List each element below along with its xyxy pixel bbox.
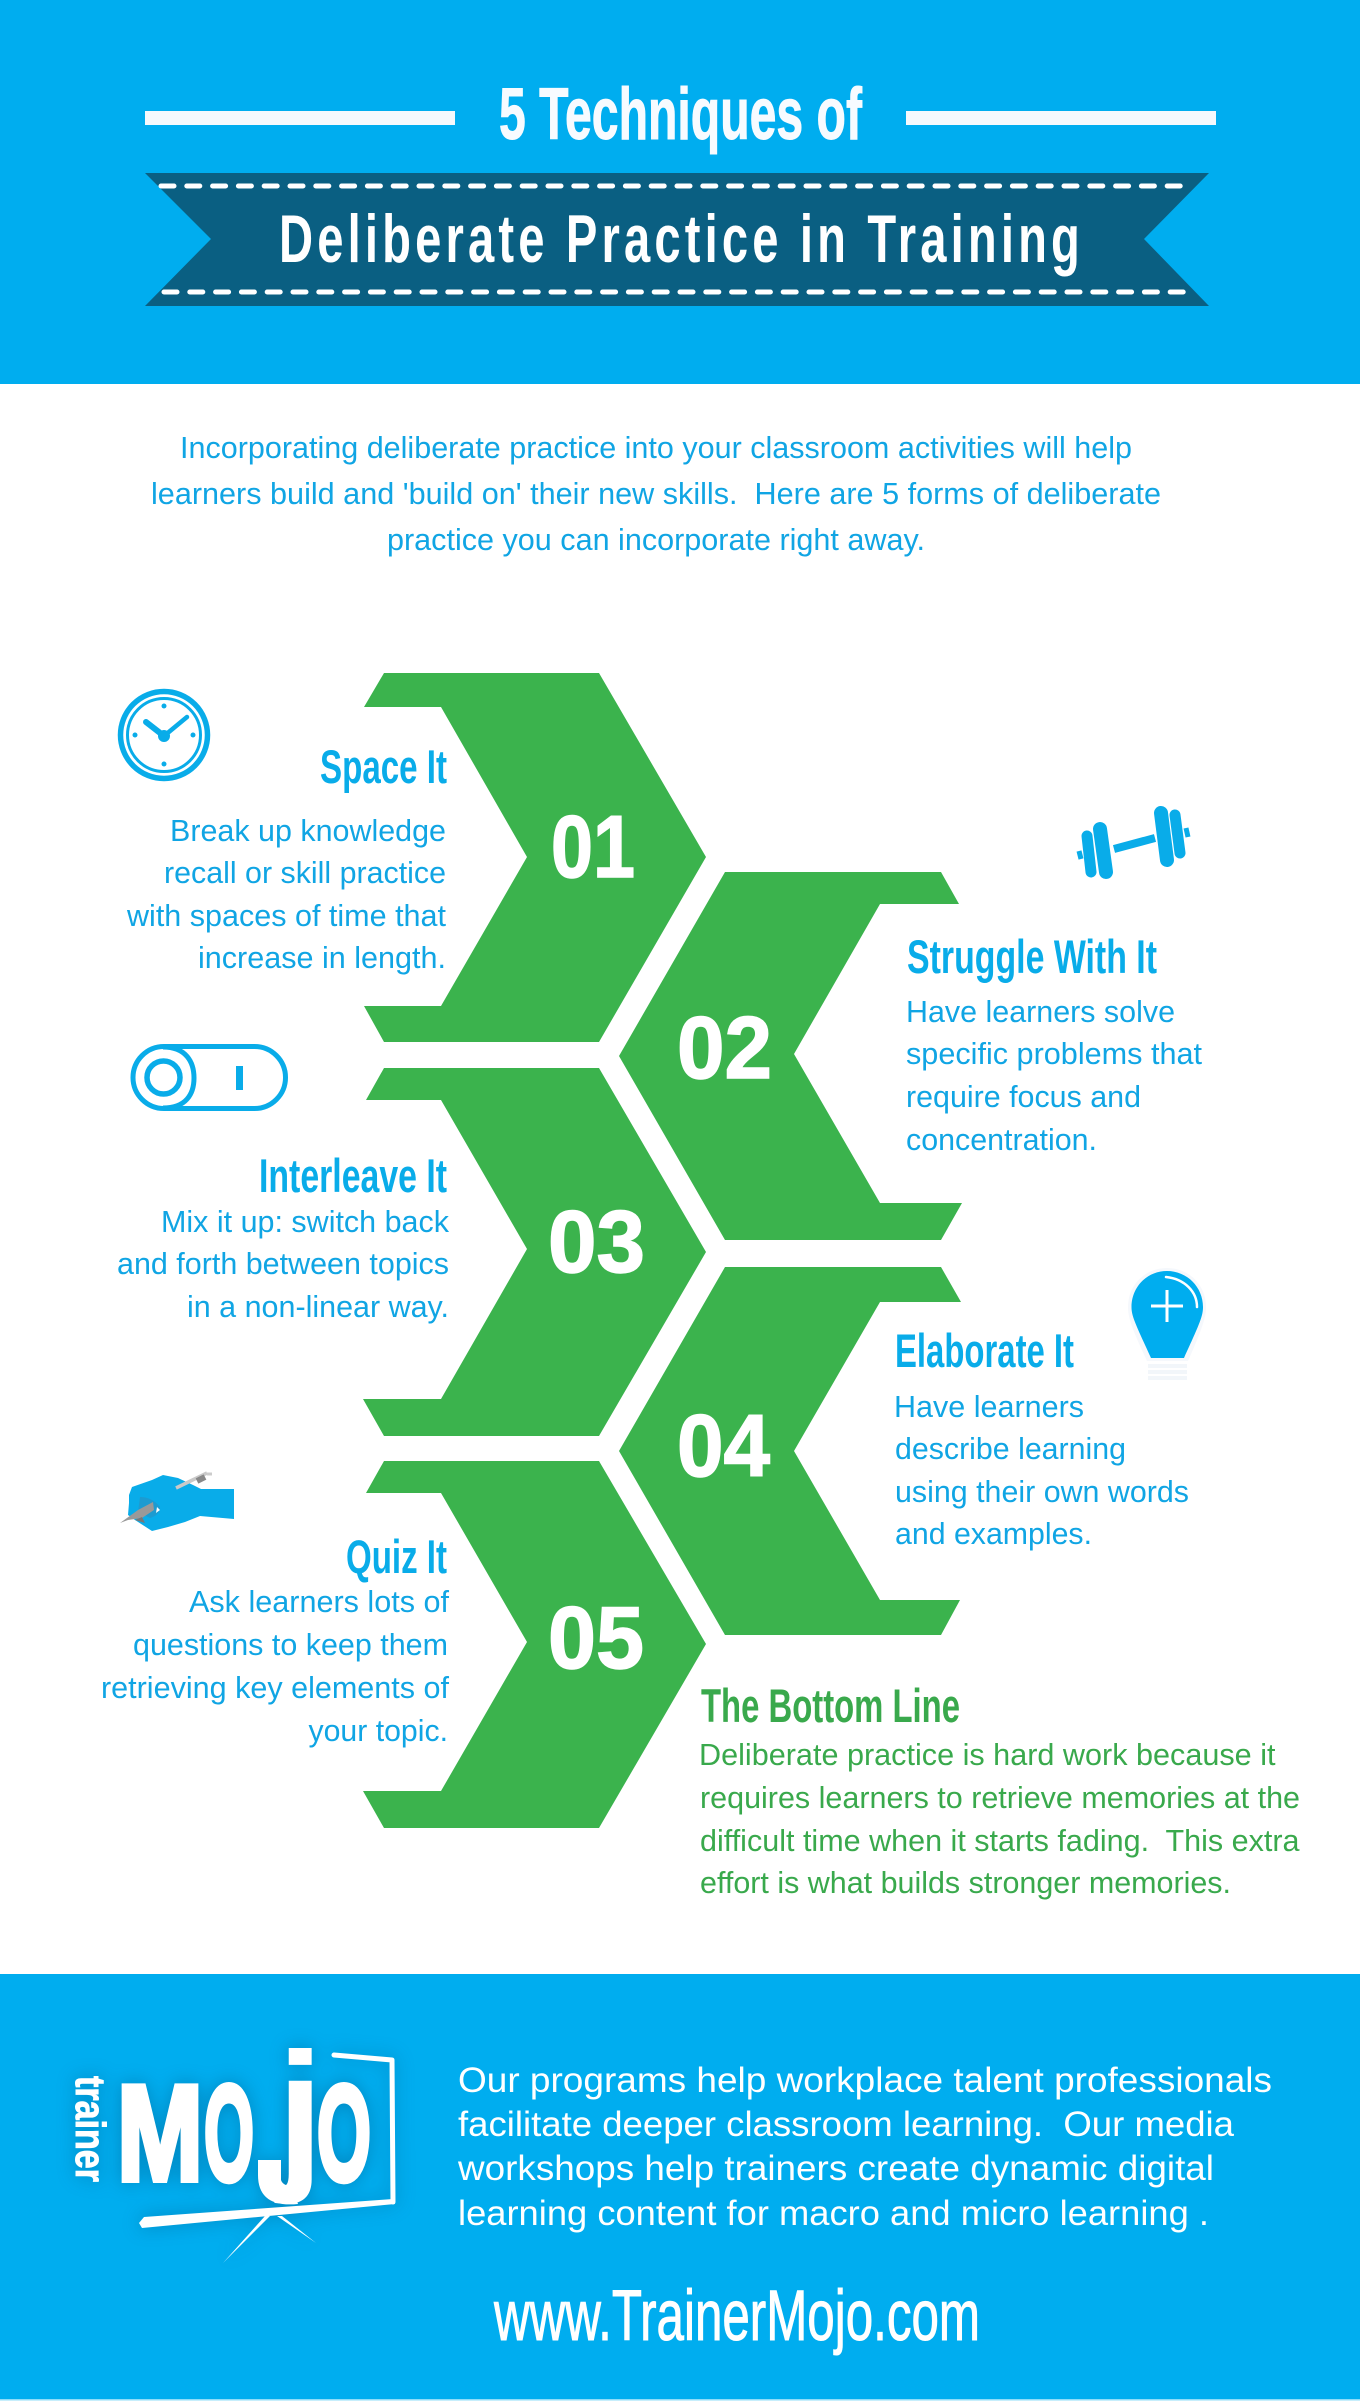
- text block: Elaborate It: and examples.: [895, 1517, 1092, 1551]
- text block: Struggle With It: specific problems that: [906, 1037, 1203, 1071]
- text block: Elaborate It: using their own words: [895, 1475, 1189, 1509]
- text block: Space It: increase in length.: [198, 941, 446, 975]
- chevron 04: [619, 1267, 961, 1635]
- footer description: facilitate deeper classroom learning. Our media: [458, 2105, 1235, 2144]
- text block: The Bottom Line: The Bottom Line: [701, 1679, 960, 1732]
- text block: Interleave It: in a non-linear way.: [187, 1290, 449, 1324]
- icon: clock: [120, 692, 208, 778]
- intro text: [151, 431, 1161, 557]
- chevron 01: [364, 673, 706, 1042]
- text block: Struggle With It: Struggle With It: [907, 930, 1157, 983]
- text block: Quiz It: Ask learners lots of: [189, 1585, 450, 1619]
- logo: Trainer Mojo: O: [317, 2057, 371, 2209]
- logo: Trainer Mojo: O: [204, 2057, 254, 2209]
- text block: Interleave It: and forth between topics: [117, 1247, 449, 1281]
- chevron 02: 02: [677, 998, 772, 1097]
- text block: Struggle With It: concentration.: [906, 1123, 1097, 1157]
- text block: Elaborate It: [894, 1324, 1189, 1551]
- text block: The Bottom Line: [699, 1679, 1300, 1900]
- text block: Struggle With It: require focus and: [906, 1080, 1141, 1114]
- text block: Interleave It: Interleave It: [259, 1149, 447, 1202]
- text block: Struggle With It: [906, 930, 1203, 1157]
- panel: header: [0, 0, 1360, 384]
- chevron 02: [619, 872, 962, 1240]
- icon: light bulb: [1128, 1268, 1206, 1380]
- chevron 05: 05: [548, 1588, 644, 1687]
- text block: Quiz It: [101, 1530, 450, 1748]
- text block: Space It: recall or skill practice: [164, 856, 446, 890]
- text block: Quiz It: your topic.: [308, 1714, 448, 1748]
- chevron 03: 03: [548, 1192, 645, 1291]
- chevron 04: 04: [677, 1396, 770, 1495]
- intro text: learners build and 'build on' their new skills. Here are 5 forms of deliberate: [151, 477, 1161, 511]
- text block: The Bottom Line: difficult time when it starts fading. This extra: [700, 1824, 1300, 1858]
- logo: Trainer Mojo: trainer: [67, 2076, 114, 2182]
- text block: Elaborate It: describe learning: [895, 1432, 1126, 1466]
- title: 5 Techniques of: 5 Techniques of: [499, 74, 862, 155]
- text block: Quiz It: retrieving key elements of: [101, 1671, 450, 1705]
- text block: Interleave It: [117, 1149, 450, 1324]
- text block: Interleave It: Mix it up: switch back: [161, 1205, 450, 1239]
- text block: Struggle With It: Have learners solve: [906, 995, 1175, 1029]
- chevron 03: [363, 1068, 706, 1436]
- chevron 01: 01: [551, 797, 635, 896]
- logo: Trainer Mojo: [67, 2019, 395, 2263]
- logo: Trainer Mojo: M: [117, 2057, 203, 2209]
- footer description: workshops help trainers create dynamic digital: [457, 2149, 1214, 2188]
- chevron 05: [363, 1461, 706, 1828]
- text block: The Bottom Line: requires learners to retrieve memories at the: [700, 1781, 1300, 1815]
- footer description: learning content for macro and micro learning .: [458, 2194, 1209, 2233]
- text block: Elaborate It: Have learners: [894, 1390, 1084, 1424]
- text block: Quiz It: Quiz It: [346, 1530, 447, 1583]
- text block: Space It: [126, 740, 447, 975]
- text block: Space It: Space It: [320, 740, 447, 793]
- text block: The Bottom Line: effort is what builds stronger memories.: [700, 1866, 1231, 1900]
- intro text: Incorporating deliberate practice into your classroom activities will help: [180, 431, 1132, 465]
- intro text: practice you can incorporate right away.: [387, 523, 925, 557]
- ribbon banner: [145, 173, 1209, 306]
- website url: www.TrainerMojo.com: [493, 2277, 980, 2356]
- icon: hand writing with pen: [120, 1473, 234, 1531]
- footer description: [457, 2061, 1272, 2233]
- footer description: Our programs help workplace talent professionals: [458, 2061, 1272, 2100]
- icon: dumbbell: [1079, 813, 1188, 872]
- text block: Elaborate It: Elaborate It: [895, 1324, 1074, 1377]
- panel: footer: [0, 1974, 1360, 2400]
- text block: The Bottom Line: Deliberate practice is hard work because it: [699, 1738, 1276, 1772]
- icon: toggle switch: [133, 1046, 286, 1108]
- text block: Space It: with spaces of time that: [126, 899, 447, 933]
- text block: Quiz It: questions to keep them: [133, 1628, 448, 1662]
- logo: Trainer Mojo: j: [274, 2019, 323, 2205]
- text block: Space It: Break up knowledge: [170, 814, 446, 848]
